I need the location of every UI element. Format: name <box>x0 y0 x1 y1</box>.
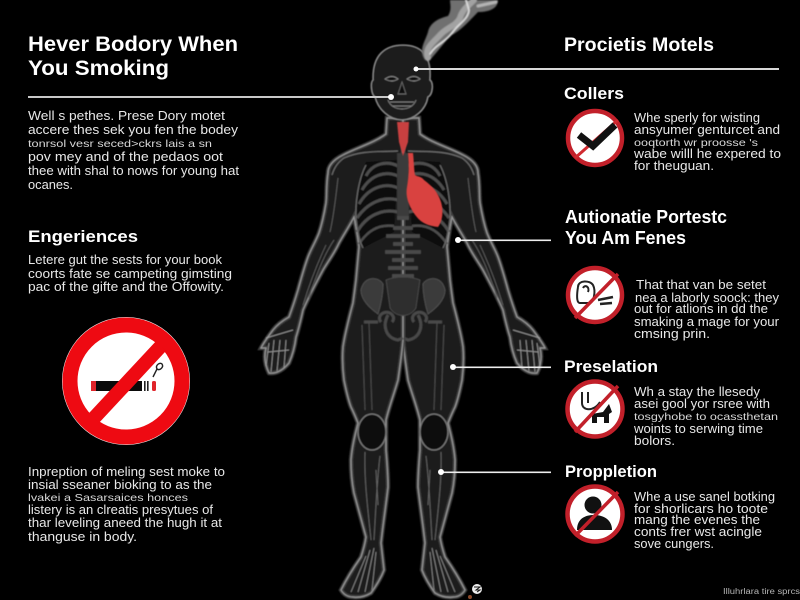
text block: engeriences: coorts fate se campeting gimsting <box>28 266 232 281</box>
text block: intro <box>28 108 239 192</box>
text block: lower left: thar leveling aneed the hugh it at <box>28 515 222 530</box>
heading: Autionatie Portestc: Autionatie Portestc <box>565 207 727 227</box>
text block: engeriences <box>28 252 232 294</box>
text block: intro: ocanes. <box>28 177 73 192</box>
spine and sternum <box>385 153 421 316</box>
text block: intro: tonrsol vesr seced>ckrs lais a sn <box>28 138 212 150</box>
text block: proppletion: for shorlicars ho toote <box>634 501 768 516</box>
icon: no smoking sign <box>62 317 190 445</box>
text block: intro: accere thes sek you fen the bodey <box>28 122 238 137</box>
icon: prohibited scroll <box>568 268 622 322</box>
text block: lower left: lvakei a Sasarsaices honces <box>28 492 188 504</box>
leader line: thigh <box>450 364 551 370</box>
text block: autionatie: cmsing prin. <box>634 326 710 341</box>
text block: intro: thee with shal to nows for young hat <box>28 163 239 178</box>
text block: autionatie <box>634 277 780 341</box>
icon: prohibited check mark <box>568 111 622 165</box>
text block: proppletion <box>634 489 775 551</box>
heading: Preselation: Preselation <box>564 357 658 376</box>
icon: prohibited figure <box>568 382 622 436</box>
text block: preselation: woints to serwing time <box>633 421 763 436</box>
text block: collers: Whe sperly for wisting <box>634 110 760 125</box>
text block: collers: ansyumer genturcet and <box>634 122 780 137</box>
text block: lower left <box>28 464 225 544</box>
text block: engeriences: Letere gut the sests for your book <box>28 252 222 267</box>
text block: preselation: bolors. <box>634 433 675 448</box>
text block: collers <box>633 110 781 173</box>
text block: proppletion: conts frer wst acingle <box>634 524 762 539</box>
heart / lung organ <box>407 153 442 227</box>
icon: prohibited person <box>568 486 622 542</box>
text block: intro: Well s pethes. Prese Dory motet <box>28 108 225 123</box>
smoke plume <box>422 0 498 60</box>
heading: main title: You Smoking <box>28 57 169 80</box>
text block: lower left: Inpreption of meling sest moke to <box>28 464 225 479</box>
text block: autionatie: That that van be setet <box>636 277 766 292</box>
text block: proppletion: sove cungers. <box>634 536 714 551</box>
heading: Autionatie Portestc <box>565 207 727 248</box>
heading: Engeriences: Engeriences <box>28 227 138 246</box>
text block: preselation: asei gool yor rsree with <box>634 396 770 411</box>
heading: Autionatie Portestc: You Am Fenes <box>565 228 686 248</box>
head <box>371 45 432 120</box>
heading: Procietis Motels: Procietis Motels <box>564 35 714 56</box>
small badge icon <box>468 584 482 599</box>
heading: Proppletion: Proppletion <box>565 462 657 481</box>
face skull <box>385 76 420 81</box>
heading: main title: Hever Bodory When <box>28 33 238 56</box>
text block: preselation <box>633 384 778 448</box>
text block: autionatie: out for atlions in dd the <box>634 301 768 316</box>
leader line: head <box>414 66 779 72</box>
heading: Collers: Collers <box>564 84 624 103</box>
leader line: ribs <box>455 237 551 243</box>
text block: autionatie: nea a laborly soock: they <box>635 290 779 305</box>
trachea <box>397 122 409 156</box>
leader line: shin <box>438 469 551 475</box>
text block: intro: pov mey and of the pedaos oot <box>28 149 223 164</box>
text block: proppletion: mang the evenes the <box>634 512 760 527</box>
text block: collers: ooqtorth wr proosse 's <box>634 137 758 149</box>
text block: collers: wabe willl he expered to <box>633 146 781 161</box>
text block: engeriences: pac of the gifte and the Offowity. <box>28 279 224 294</box>
text block: lower left: listery is an clreatis presytues of <box>28 502 213 517</box>
body right half <box>403 118 545 597</box>
text block: lower left: insial sseaner bioking to as the <box>28 477 212 492</box>
text block: proppletion: Whe a use sanel botking <box>634 489 775 504</box>
heading: main title <box>28 33 238 80</box>
body left half <box>261 118 403 597</box>
text block: lower left: thanguse in body. <box>28 529 137 544</box>
text block: preselation: tosgyhobe to ocassthetan <box>634 411 778 423</box>
text block: collers: for theuguan. <box>634 158 714 173</box>
text block: preselation: Wh a stay the llesedy <box>634 384 760 399</box>
leader line: face <box>28 94 394 100</box>
text block: autionatie: smaking a mage for your <box>634 314 780 329</box>
human body x-ray figure <box>261 45 545 597</box>
footer credit: Illuhrlara tire sprcs <box>723 587 800 596</box>
